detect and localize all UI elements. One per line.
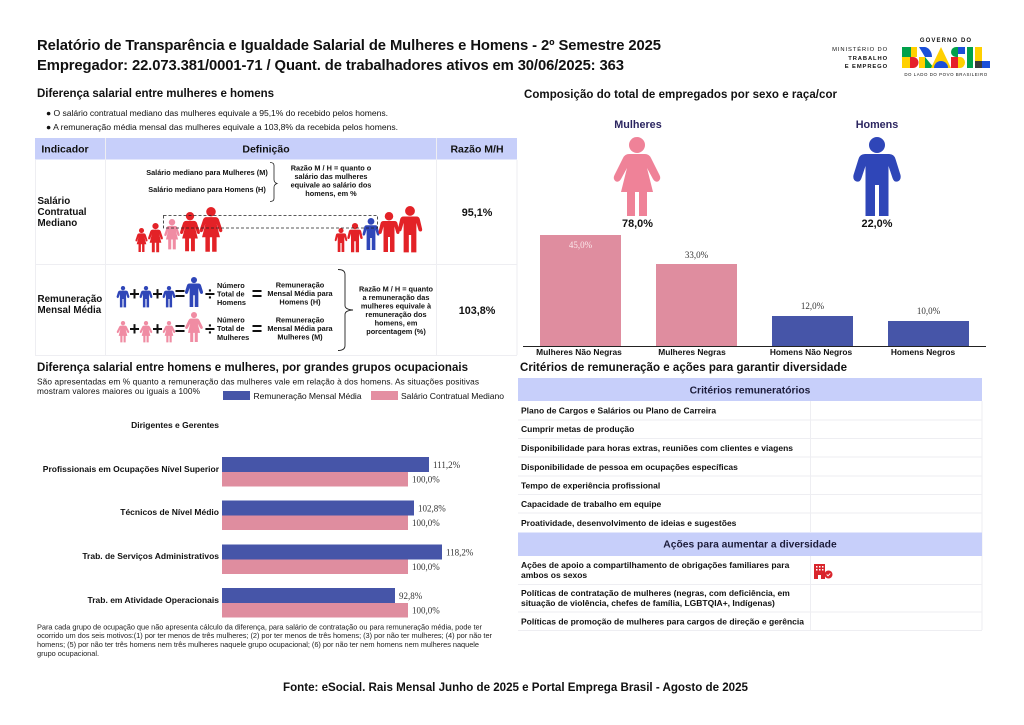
icon: mulheres 78% [614,119,662,230]
description text [37,376,479,396]
logo: Ministério do Trabalho e Emprego: E EMPREGO [845,64,888,70]
row label: salário contratual mediano [38,196,87,229]
formula: men average: ÷ [205,284,215,304]
bar chart: composição: Homens Negros [891,347,955,357]
title: Relatório de Transparência e Igualdade Salarial de Mulheres e Homens - 2º Semestre 2025 [37,38,661,54]
formula: women average: Mulheres (M) [277,332,323,342]
row label: salário contratual mediano: Salário [38,196,70,207]
source: Fonte: eSocial. Rais Mensal Junho de 2025 e Portal Emprega Brasil - Agosto de 2025 [283,681,749,694]
panel: ações table: Ações para aumentar a diversidade [663,540,837,550]
footnote [37,622,493,658]
formula: men average: Mensal Média para [267,289,334,298]
action rows: Políticas de contratação de mulheres (negras, com deficiência, em [521,588,790,598]
heading: diferença salarial: Diferença salarial entre mulheres e homens [37,88,274,100]
row label: remuneração mensal média: Remuneração [38,294,102,305]
action rows: situação de violência, chefes de família, LGBTQIA+, Indígenas) [521,598,775,608]
formula: men average: Número [217,281,245,290]
formula: women average [117,312,334,342]
bullet list: ● O salário contratual mediano das mulheres equivale a 95,1% do recebido pelos homens. [46,108,388,118]
logo: Governo do Brasil [902,38,990,77]
bar chart: composição: Mulheres Negras [658,347,726,357]
formula: women average: + [129,319,140,339]
table header: Indicador [41,144,89,156]
formula: women average: Remuneração [276,316,325,324]
brace and ratio explanation: a remuneração das [363,293,429,302]
criteria rows: Disponibilidade para horas extras, reuniões com clientes e viagens [521,443,793,453]
row label: remuneração mensal média: Mensal Média [38,305,102,316]
logo: Governo do Brasil: GOVERNO DO [920,38,972,44]
table header: Definição [242,144,290,156]
table header [41,144,504,156]
formula: women average: Total de [217,324,245,333]
panel: indicator table [35,138,517,356]
title [37,38,661,74]
criteria rows: Proatividade, desenvolvimento de ideias e sugestões [521,518,737,528]
bar chart: grupos ocupacionais: Trab. em Atividade Operacionais [88,595,219,605]
formula: women average: Mulheres [217,333,249,342]
icon: homens 22%: 22,0% [862,218,893,230]
action rows: Ações de apoio a compartilhamento de obrigações familiares para [521,560,790,570]
formula: men average: + [129,284,140,304]
panel: critérios table [518,378,982,630]
criteria rows: Plano de Cargos e Salários ou Plano de Carreira [521,406,716,416]
heading: grupos ocupacionais: Diferença salarial entre homens e mulheres, por grandes grupos ocupacionais [37,362,468,374]
formula: men average: Homens (H) [279,298,321,306]
action rows: ambos os sexos [521,570,587,580]
logo: Governo do Brasil: DO LADO DO POVO BRASILEIRO [904,72,988,77]
formula: men average: = [175,284,185,304]
formula: men average: Remuneração [276,280,325,290]
action rows [521,560,804,626]
formula: men average: Homens [217,298,246,307]
panel: ações table [518,532,982,630]
icon: mulheres 78%: 78,0% [622,218,653,230]
heading: composição: Composição do total de empregados por sexo e raça/cor [524,89,838,101]
definition: salário mediano labels: homens, em % [305,189,357,198]
criteria rows [521,406,793,528]
logo: Ministério do Trabalho e Emprego: MINISTÉRIO DO [832,46,888,53]
bar chart: grupos ocupacionais: 118,2% [446,548,474,558]
value: remuneração ratio: 103,8% [459,305,496,317]
criteria rows: Tempo de experiência profissional [521,480,660,490]
definition: salário mediano labels [146,162,372,202]
table header: Razão M/H [450,144,504,156]
description text: mostram valores maiores ou iguais a 100% [37,386,201,396]
value: salário ratio: 95,1% [462,207,493,219]
bar chart: grupos ocupacionais: Trab. de Serviços Administrativos [82,551,219,561]
legend [223,391,504,401]
criteria rows: Cumprir metas de produção [521,424,634,434]
formula: women average: + [152,319,163,339]
formula: men average [117,277,334,307]
action rows: Políticas de promoção de mulheres para cargos de direção e gerência [521,616,804,626]
bar chart: grupos ocupacionais: 111,2% [433,460,461,470]
icons: women median row [135,207,222,252]
criteria rows: Disponibilidade de pessoa em ocupações específicas [521,462,738,472]
formula: men average: + [152,284,163,304]
formula: women average: Número [217,316,245,324]
row label: remuneração mensal média [38,294,102,316]
bar chart: composição: 12,0% [801,301,825,311]
definition: salário mediano labels: salário das mulheres [294,172,368,181]
icons: men median row [335,206,422,252]
bar chart: grupos ocupacionais: Dirigentes e Gerentes [131,420,219,430]
brace and ratio explanation: mulheres equivale à [361,302,432,310]
footnote: ocorrido um dos seis motivos:(1) por ter menos de três mulheres; (2) por ter menos de três homens; (3) por não ter mulheres; (4) por não ter [37,631,493,640]
definition: salário mediano labels: equivale ao salário dos [291,180,371,190]
bullet list [46,108,398,132]
icon: homens 22%: Homens [856,119,898,131]
formula: men average: = [252,284,262,304]
description text: São apresentadas em % quanto a remuneração das mulheres vale em relação à dos homens. As situações positivas [37,376,479,386]
panel: critérios table: Critérios remuneratórios [690,386,811,396]
icon: mulheres 78%: Mulheres [614,119,662,131]
bar chart: composição: 10,0% [917,306,941,316]
logo: Ministério do Trabalho e Emprego [832,46,888,70]
icon: homens 22% [853,119,901,230]
footnote: grupo ocupacional. [37,649,99,658]
legend: Remuneração Mensal Média [254,391,362,401]
heading: critérios e ações: Critérios de remuneração e ações para garantir diversidade [520,362,847,374]
bar chart: grupos ocupacionais: Técnicos de Nível Médio [120,507,219,517]
bar chart: composição: 45,0% [569,240,593,250]
icon: red building with check [814,564,832,579]
title: Empregador: 22.073.381/0001-71 / Quant. de trabalhadores ativos em 30/06/2025: 363 [37,58,624,74]
footnote: Para cada grupo de ocupação que não apresenta cálculo da diferença, para salário de contratação ou para remuneração média, pode ter [37,622,483,632]
bar chart: grupos ocupacionais: 100,0% [412,474,440,484]
logo: Ministério do Trabalho e Emprego: TRABALHO [848,56,888,62]
brace and ratio explanation [338,270,434,350]
brace and ratio explanation: homens, em [375,318,418,328]
brace and ratio explanation: remuneração dos [365,310,427,319]
bar chart: composição [523,235,986,357]
formula: women average: Mensal Média para [267,324,334,333]
bar chart: grupos ocupacionais: 100,0% [412,606,440,616]
row label: salário contratual mediano: Mediano [38,218,77,229]
legend: Salário Contratual Mediano [401,391,504,401]
formula: women average: = [175,319,185,339]
bar chart: composição: 33,0% [685,250,709,260]
footnote: homens; (5) por não ter três homens nem três mulheres naquele grupo ocupacional; (6) por não ter nem homens nem mulheres naquele [37,640,479,649]
definition: salário mediano labels: Salário mediano para Homens (H) [148,185,266,194]
row label: salário contratual mediano: Contratual [38,207,87,218]
formula: men average: Total de [217,290,245,298]
criteria rows: Capacidade de trabalho em equipe [521,499,662,509]
brace and ratio explanation: Razão M / H = quanto [359,284,434,294]
bar chart: grupos ocupacionais: Profissionais em Ocupações Nível Superior [43,464,220,474]
formula: women average: = [252,319,262,339]
bar chart: composição: Homens Não Negros [770,347,853,357]
bar chart: grupos ocupacionais [43,420,474,618]
definition: salário mediano labels: Salário mediano para Mulheres (M) [146,168,268,177]
brace and ratio explanation: porcentagem (%) [366,327,426,336]
bar chart: composição: Mulheres Não Negras [536,347,622,357]
bar chart: grupos ocupacionais: 102,8% [418,504,446,514]
definition: salário mediano labels: Razão M / H = quanto o [291,164,372,172]
bar chart: grupos ocupacionais: 100,0% [412,562,440,572]
bullet list: ● A remuneração média mensal das mulheres equivale a 103,8% da recebida pelos homens. [46,122,398,132]
bar chart: grupos ocupacionais: 100,0% [412,518,440,528]
formula: women average: ÷ [205,319,215,339]
bar chart: grupos ocupacionais: 92,8% [399,591,423,601]
